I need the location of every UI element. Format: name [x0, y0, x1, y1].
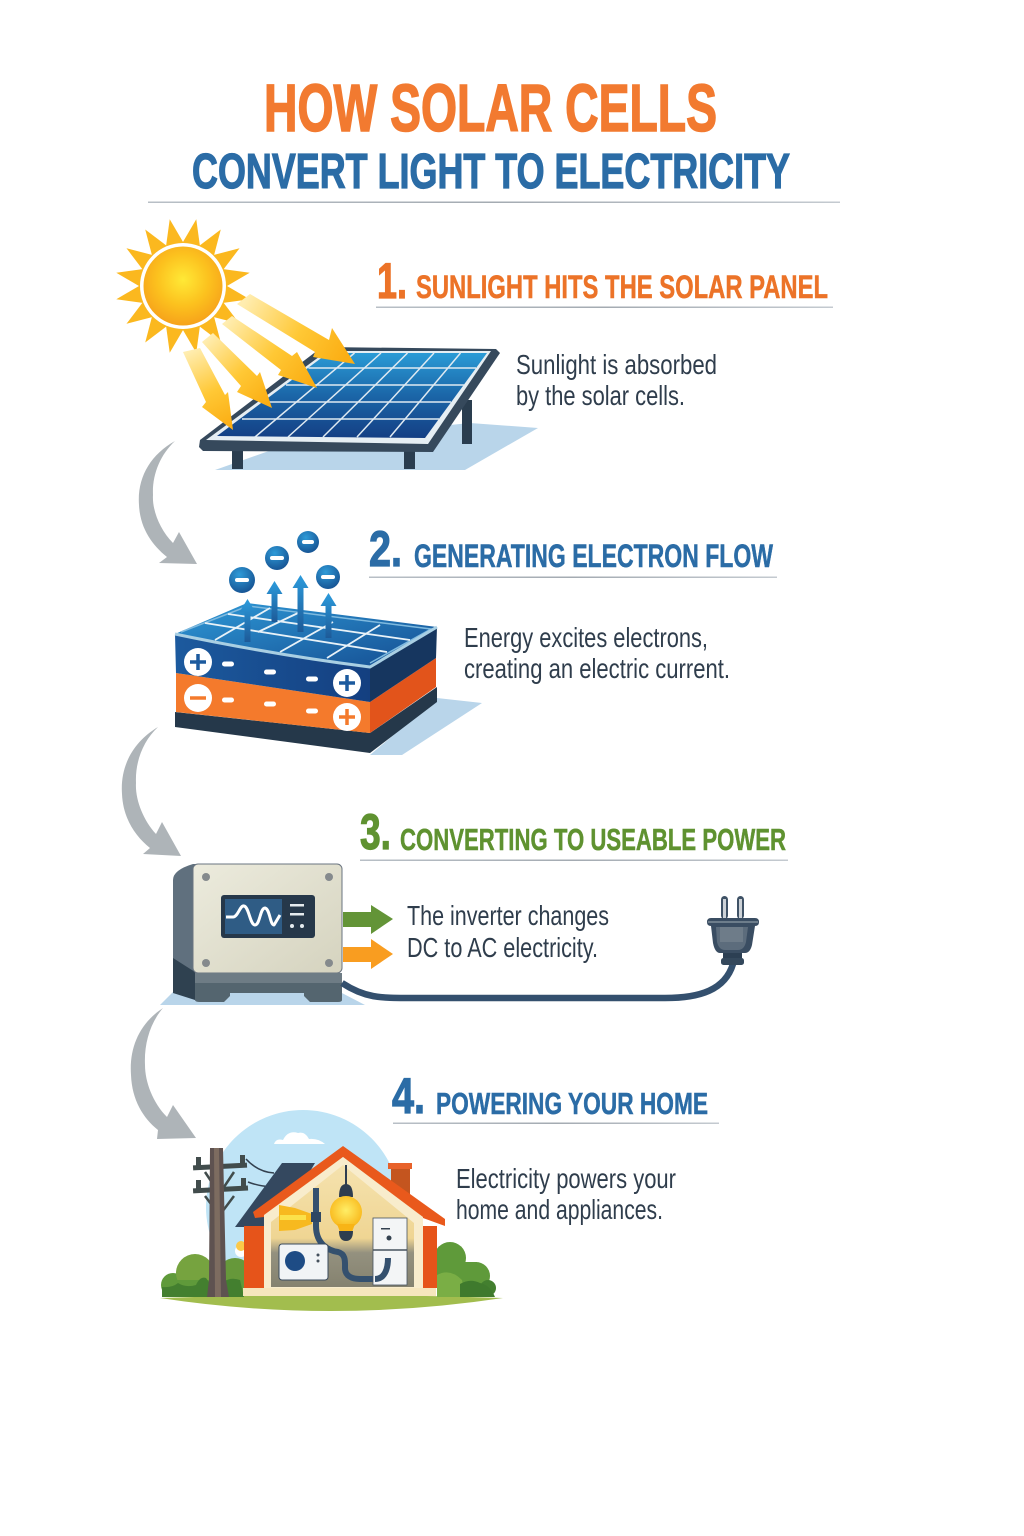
- icon: utility pole: [193, 1148, 248, 1297]
- heading: step 3: CONVERTING TO USEABLE POWER: [400, 822, 786, 857]
- text: step 1 description: by the solar cells.: [516, 380, 685, 411]
- text: step 4 description: [456, 1163, 676, 1225]
- text: step 1 description: [516, 349, 717, 411]
- icon: power cord and plug: [342, 896, 759, 998]
- text: step 2 description: [464, 622, 730, 684]
- heading: step 4: 4.: [392, 1068, 425, 1124]
- heading: step 1: SUNLIGHT HITS THE SOLAR PANEL: [416, 269, 828, 305]
- illustration: house: [160, 1110, 503, 1311]
- heading: step 3: [360, 804, 788, 861]
- heading: step 4: POWERING YOUR HOME: [436, 1086, 708, 1121]
- icon: sun: [115, 218, 251, 354]
- heading: step 2: GENERATING ELECTRON FLOW: [414, 538, 774, 574]
- text: step 3 description: DC to AC electricity.: [407, 932, 598, 963]
- heading: step 1: 1.: [377, 253, 407, 309]
- text: step 4 description: Electricity powers your: [456, 1163, 676, 1194]
- icon: light bulb: [330, 1165, 362, 1241]
- arrow: step 2 to step 3: [122, 727, 181, 856]
- text: step 3 description: The inverter changes: [407, 900, 609, 931]
- panel: step 1 sunlight: [115, 218, 833, 470]
- title: CONVERT LIGHT TO ELECTRICITY: [192, 145, 790, 199]
- arrow: DC output: [343, 905, 393, 934]
- title: HOW SOLAR CELLS: [264, 71, 717, 146]
- icon: washing machine: [279, 1244, 328, 1280]
- illustration: solar panel: [199, 347, 538, 470]
- icon: left bushes: [161, 1254, 253, 1297]
- text: step 2 description: Energy excites electrons,: [464, 622, 708, 653]
- panel: step 4 powering home: [160, 1068, 719, 1311]
- icon: right bushes: [434, 1242, 496, 1297]
- text: step 4 description: home and appliances.: [456, 1194, 663, 1225]
- arrow: AC output: [343, 939, 393, 969]
- heading: step 3: 3.: [360, 804, 391, 860]
- arrow: step 1 to step 2: [139, 441, 197, 564]
- icon: sunlight arrows: [183, 294, 355, 430]
- text: step 1 description: Sunlight is absorbed: [516, 349, 717, 380]
- icon: electrons rising: [229, 531, 340, 642]
- text: step 2 description: creating an electric current.: [464, 653, 730, 684]
- arrow: step 3 to step 4: [131, 1008, 196, 1139]
- heading: step 4: [392, 1068, 719, 1124]
- heading: step 2: 2.: [369, 521, 402, 577]
- text: step 3 description: [407, 900, 609, 963]
- panel: step 2 electron flow: [175, 521, 777, 755]
- illustration: inverter: [160, 864, 365, 1005]
- heading: step 1: [376, 253, 833, 309]
- illustration: solar cell layers: [175, 603, 482, 755]
- title: [192, 71, 790, 199]
- heading: step 2: [369, 521, 777, 578]
- panel: step 3 converting power: [160, 804, 788, 1005]
- icon: refrigerator: [373, 1218, 407, 1285]
